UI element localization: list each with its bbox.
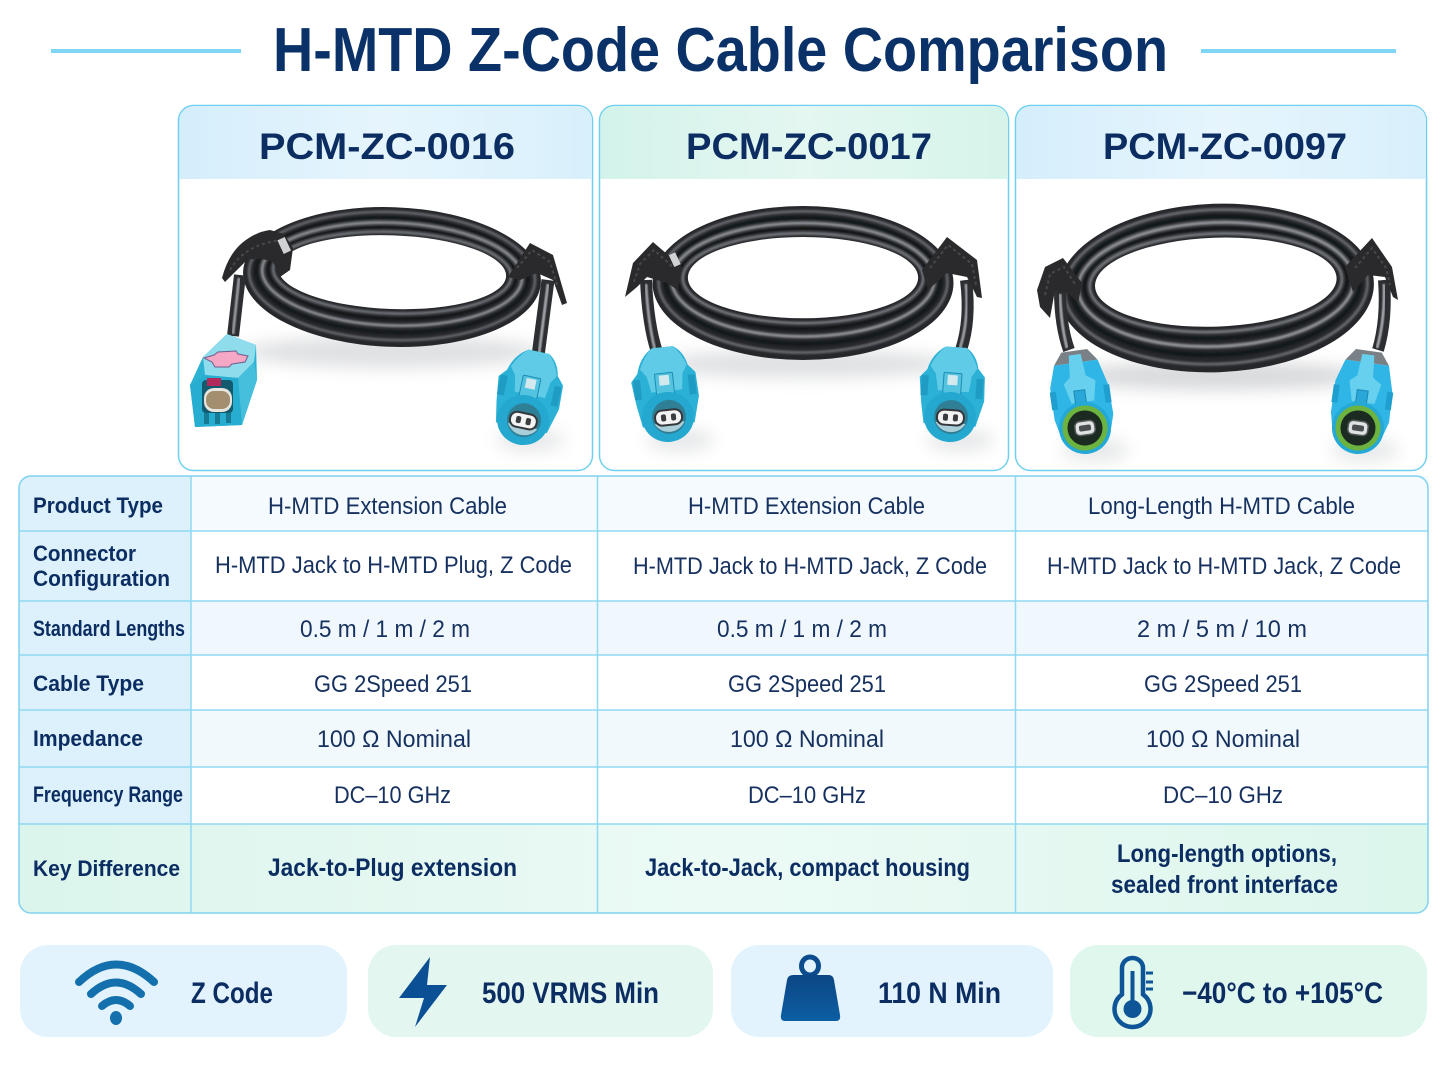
image: cable PCM-ZC-0017 xyxy=(625,206,994,452)
row: Cable Type xyxy=(33,671,1302,698)
title: H-MTD Z-Code Cable Comparison xyxy=(273,16,1168,85)
row: Product Type: Long-Length H-MTD Cable xyxy=(1088,493,1355,520)
connector: plug right xyxy=(486,345,570,451)
row: Cable Type: GG 2Speed 251 xyxy=(1144,671,1302,698)
row: Impedance: 100 Ω Nominal xyxy=(317,726,471,753)
row: Product Type xyxy=(33,493,1355,520)
icon: weight xyxy=(781,957,840,1021)
row: Key Difference: sealed front interface xyxy=(1111,871,1338,899)
row: Key Difference: Long-length options, xyxy=(1117,840,1337,868)
connector: right jack xyxy=(915,345,988,444)
connector: jack left xyxy=(190,334,257,427)
row: Impedance: 100 Ω Nominal xyxy=(730,726,884,753)
heading: PCM-ZC-0016: PCM-ZC-0016 xyxy=(259,126,515,167)
row: Impedance: 100 Ω Nominal xyxy=(1146,726,1300,753)
row: Standard Lengths: 2 m / 5 m / 10 m xyxy=(1137,616,1307,643)
row: Frequency Range: DC–10 GHz xyxy=(1163,782,1283,809)
row: Connector Configuration: Connector xyxy=(33,541,136,566)
connector: left jack xyxy=(628,344,703,445)
row: Standard Lengths xyxy=(33,616,1307,643)
row: Connector Configuration xyxy=(33,541,1401,591)
badge: 110 N Min xyxy=(731,945,1053,1037)
row: Connector Configuration: H-MTD Jack to H-MTD Jack, Z Code xyxy=(633,553,987,580)
row: Key Difference: Jack-to-Jack, compact housing xyxy=(645,854,970,882)
image: cable PCM-ZC-0097 xyxy=(1037,198,1399,462)
row: Frequency Range: DC–10 GHz xyxy=(334,782,451,809)
row: Impedance: Impedance xyxy=(33,726,143,751)
row: Product Type: H-MTD Extension Cable xyxy=(268,493,507,520)
connector: left sealed jack xyxy=(1044,347,1118,458)
row: Connector Configuration: Configuration xyxy=(33,566,170,591)
badge: 500 VRMS Min xyxy=(368,945,713,1037)
row: Cable Type: Cable Type xyxy=(33,671,144,696)
row: Impedance xyxy=(33,726,1300,753)
heading: PCM-ZC-0097: PCM-ZC-0097 xyxy=(1103,126,1347,167)
row: Frequency Range: DC–10 GHz xyxy=(748,782,866,809)
heading: PCM-ZC-0017: PCM-ZC-0017 xyxy=(686,126,932,167)
row: Key Difference: Jack-to-Plug extension xyxy=(268,854,517,882)
badge: Z Code xyxy=(20,945,347,1037)
icon: wireless signal xyxy=(79,964,154,1025)
panel: PCM-ZC-0016 xyxy=(178,106,592,470)
panel: PCM-ZC-0097 xyxy=(1016,106,1426,470)
row: Standard Lengths: 0.5 m / 1 m / 2 m xyxy=(300,616,470,643)
panel: PCM-ZC-0017 xyxy=(600,106,1008,470)
row: Standard Lengths: Standard Lengths xyxy=(33,616,185,641)
icon: thermometer xyxy=(1114,958,1153,1027)
icon: lightning bolt xyxy=(399,957,447,1027)
row: Standard Lengths: 0.5 m / 1 m / 2 m xyxy=(717,616,887,643)
row: Frequency Range xyxy=(33,782,1283,809)
row: Key Difference: Key Difference xyxy=(33,856,180,881)
row: Frequency Range: Frequency Range xyxy=(33,782,183,807)
badge: Z Code: Z Code xyxy=(191,977,273,1010)
badge: temperature range xyxy=(1070,945,1427,1037)
badge: 500 VRMS Min: 500 VRMS Min xyxy=(482,977,659,1010)
row: Connector Configuration: H-MTD Jack to H-MTD Plug, Z Code xyxy=(215,552,572,579)
connector: right sealed jack xyxy=(1325,347,1399,458)
row: Product Type: Product Type xyxy=(33,493,163,518)
row: Key Difference xyxy=(33,840,1338,899)
comparison table xyxy=(19,476,1428,913)
badge: temperature range: −40°C to +105°C xyxy=(1182,977,1383,1010)
row: Product Type: H-MTD Extension Cable xyxy=(688,493,925,520)
row: Connector Configuration: H-MTD Jack to H-MTD Jack, Z Code xyxy=(1047,553,1401,580)
row: Cable Type: GG 2Speed 251 xyxy=(314,671,472,698)
image: cable PCM-ZC-0016 xyxy=(190,202,570,452)
badge: 110 N Min: 110 N Min xyxy=(878,977,1001,1010)
row: Cable Type: GG 2Speed 251 xyxy=(728,671,886,698)
